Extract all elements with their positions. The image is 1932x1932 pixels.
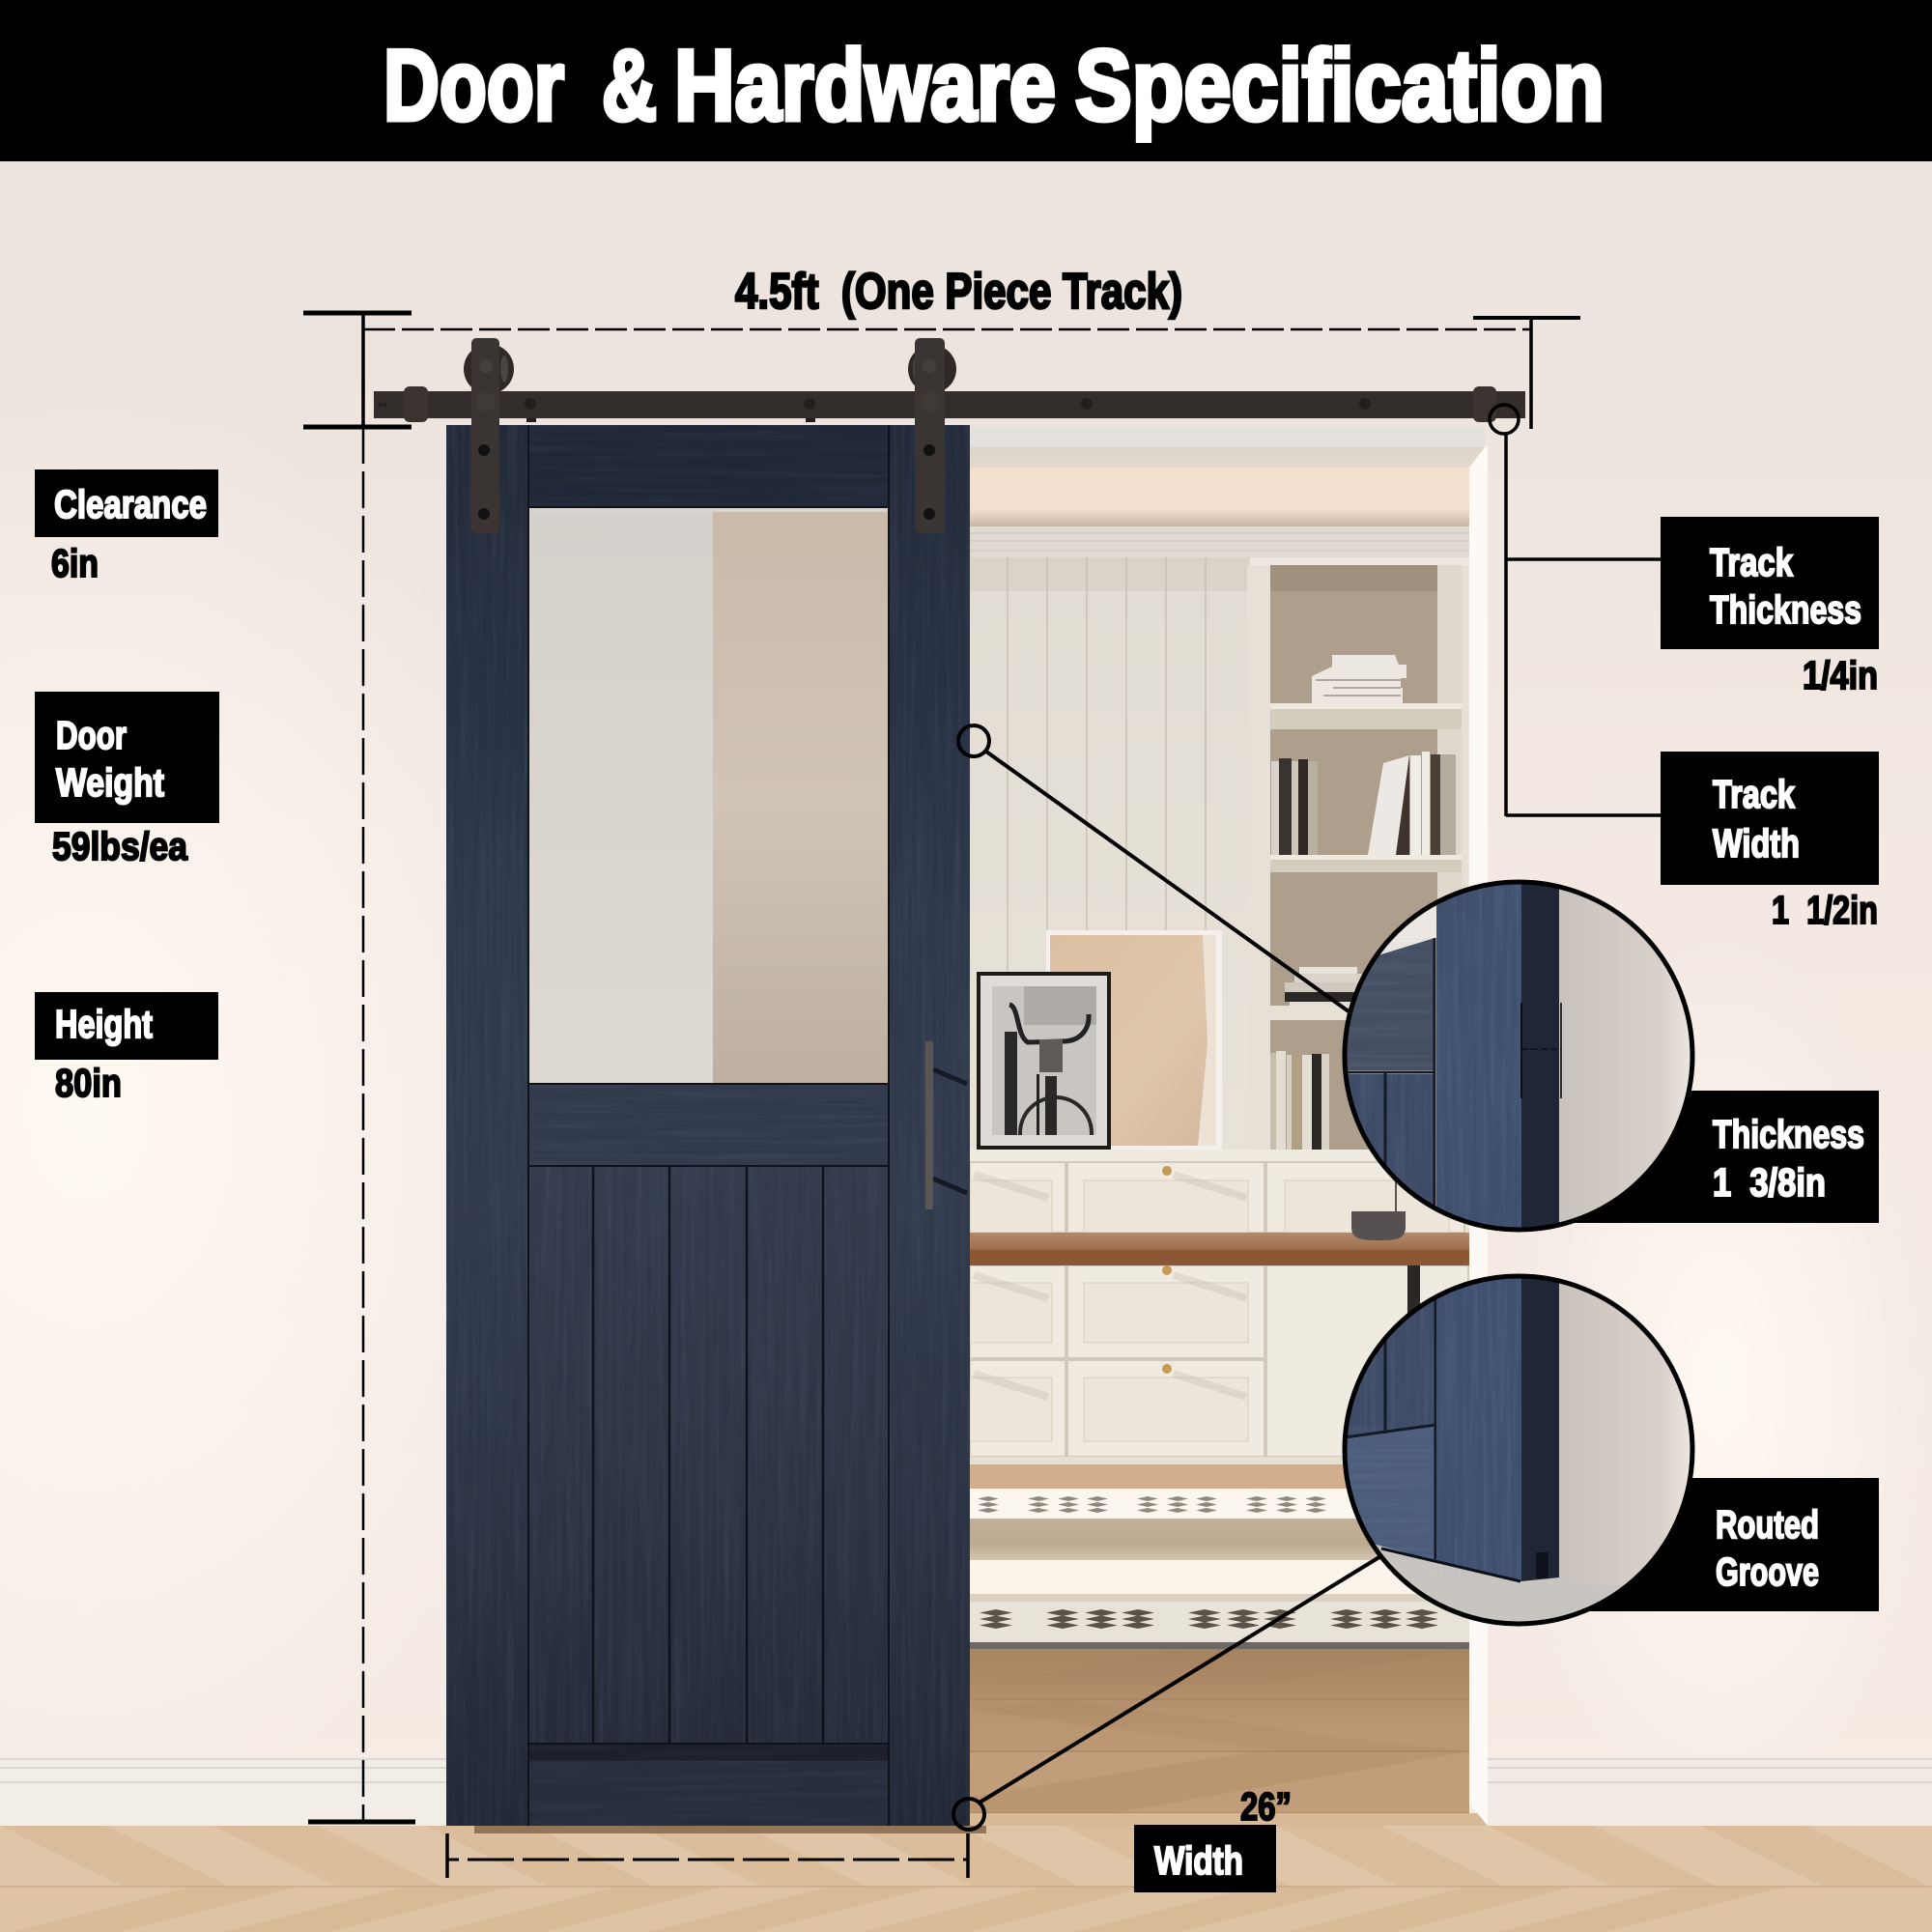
callout: routed groove [953,1276,1694,1830]
label: track thickness: 1/4in [1803,653,1878,697]
label: routed groove: Groove [1716,1549,1819,1594]
label: door thickness: Thickness [1713,1112,1864,1156]
label: height: Height [55,1002,153,1046]
label: clearance [35,469,218,585]
door jamb [1469,447,1488,1826]
desk with cup [970,1179,1469,1314]
ceiling reveal and warm light [970,426,1485,557]
label: track thickness [1661,517,1879,697]
cabinets [970,1150,1469,1464]
label: routed groove [1716,1502,1819,1594]
dimension: width [447,1833,968,1878]
books [1270,655,1456,1150]
title: Specification [1075,30,1605,142]
leaning artwork [1046,930,1222,1151]
track rail [374,391,1525,418]
callout: edge thickness [958,725,1694,1236]
dimension: height [303,313,415,1822]
title: & [602,30,657,142]
label: track thickness: Track [1710,540,1793,584]
wood floor [0,1826,1932,1932]
label: width: Width [1154,1838,1243,1883]
track callout lines [1490,405,1661,816]
label: height: 80in [55,1061,122,1105]
door stiles [446,425,970,1826]
detail circle [1345,882,1694,1236]
dimension: track length [363,318,1580,429]
label: track width: Track [1713,772,1795,816]
door rails [528,425,889,1826]
label: door weight: Door [56,713,127,757]
left hanger [464,338,514,533]
glass panel [528,507,889,1087]
right hanger [908,338,956,533]
label: width: 26” [1240,1784,1292,1829]
label: height [35,992,218,1105]
label: track width: 1 1/2in [1772,888,1878,932]
label: door weight: 59lbs/ea [52,824,188,868]
room scene through opening [970,426,1488,1826]
black label: thickness backing [1565,1091,1879,1223]
lower plank panels [528,425,889,1826]
label: track width: Width [1713,821,1800,866]
leader line [953,1555,1382,1830]
label: clearance: 6in [51,541,99,585]
leader line [958,725,1349,1011]
track length label: 4.5ft (One Piece Track) [735,264,1182,320]
track and hardware [374,338,1525,533]
label: track width [1661,752,1879,932]
label: door weight: Weight [56,760,164,805]
baseboards [0,1756,1932,1826]
barn door [446,425,970,1826]
door handle [925,1041,967,1209]
label: door thickness: 1 3/8in [1713,1160,1826,1205]
label: routed groove: Routed [1716,1502,1819,1547]
black label: routed groove backing [1565,1478,1879,1611]
header bar [0,0,1932,161]
title [384,30,1605,142]
label: door thickness [1713,1112,1864,1205]
title: Hardware [674,30,1056,142]
label: width [1134,1784,1292,1892]
label: track thickness: Thickness [1710,587,1861,632]
label: clearance: Clearance [54,482,207,526]
track bolts [378,398,1371,422]
label: door weight [35,692,219,868]
bookcase [1247,565,1468,1151]
room floor and rug [970,1464,1488,1826]
title: Door [384,30,564,142]
beadboard wall [970,557,1250,1151]
track stops [404,386,1496,422]
detail circle [1345,1276,1694,1633]
framed bicycle photo [977,972,1111,1169]
